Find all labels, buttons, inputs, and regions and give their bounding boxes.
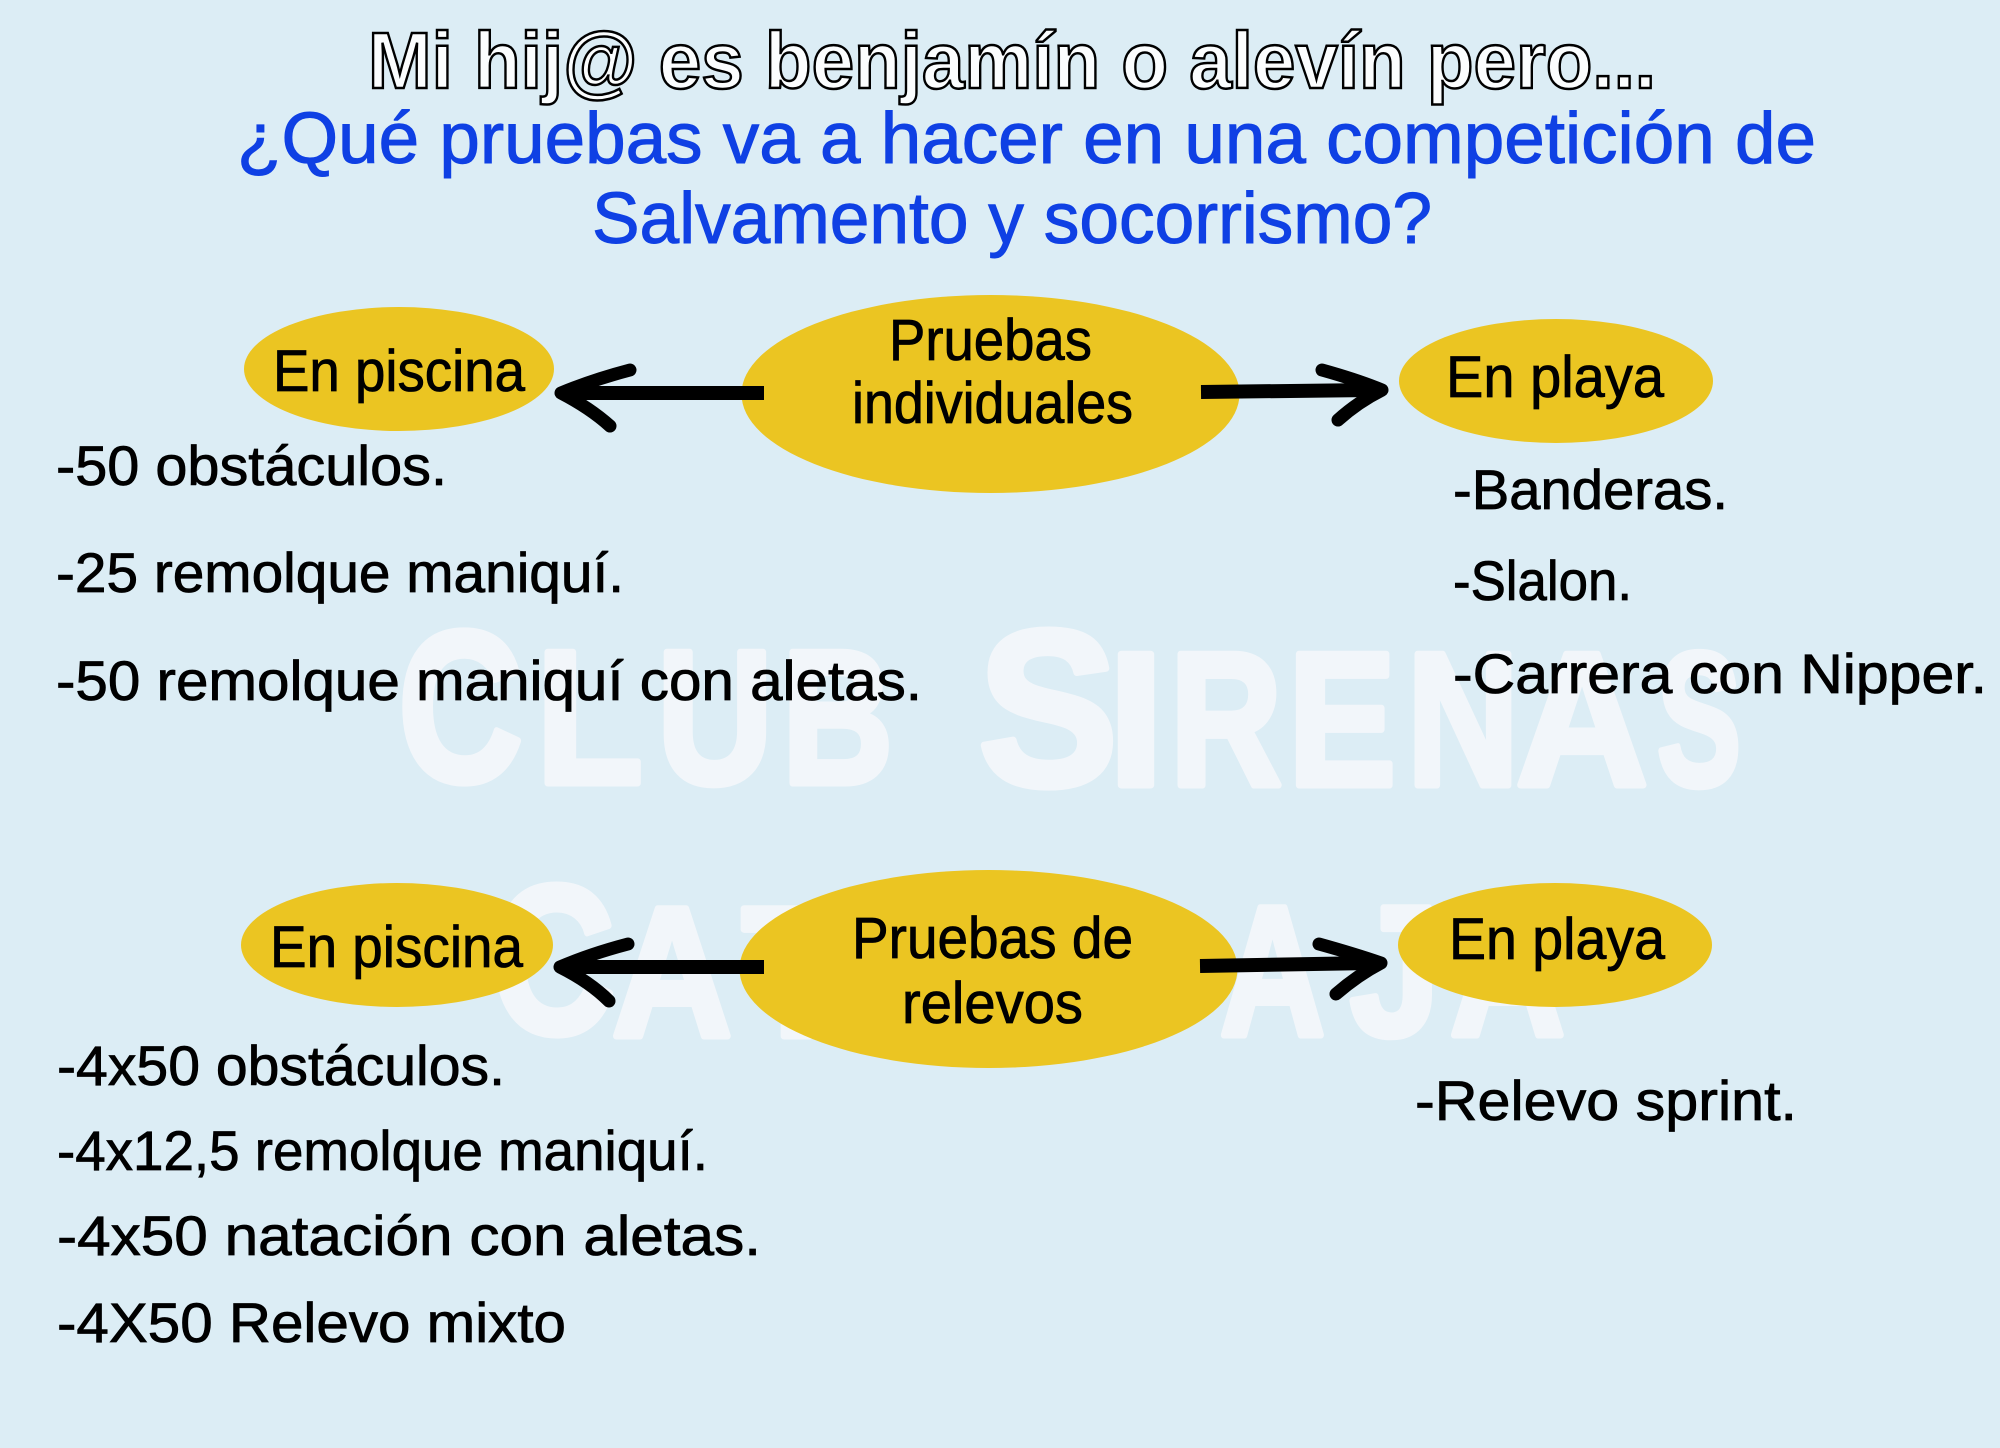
list: individual beach events: -Banderas. — [1453, 458, 1728, 521]
node: En playa individual: En playa — [1446, 345, 1665, 410]
list: relay pool events: -4x50 obstáculos. — [57, 1034, 505, 1097]
watermark: Club Sirenas: L — [536, 612, 643, 824]
title: Mi hij@ es benjamín o alevín pero... — [368, 16, 1656, 105]
list: individual beach events — [1453, 458, 1987, 705]
watermark: Club Sirenas — [398, 585, 1741, 833]
subtitle — [237, 99, 1816, 259]
list: relay beach events: -Relevo sprint. — [1415, 1069, 1797, 1132]
node: En playa individual — [1399, 319, 1713, 443]
node: Pruebas individuales — [742, 295, 1240, 493]
watermark: Club Sirenas: E — [1288, 614, 1396, 826]
subtitle: Salvamento y socorrismo? — [592, 179, 1432, 259]
watermark: second line, mostly hidden behind the ellipses: A — [1220, 869, 1325, 1075]
node: En piscina relevos: En piscina — [270, 915, 524, 980]
list: individual pool events: -50 obstáculos. — [56, 434, 447, 497]
watermark: Club Sirenas: S — [978, 585, 1118, 833]
list: relay pool events — [57, 1034, 761, 1354]
watermark: Club Sirenas: A — [1516, 614, 1648, 826]
watermark: Club Sirenas: U — [657, 612, 773, 824]
list: relay pool events: -4X50 Relevo mixto — [57, 1291, 566, 1354]
node: Pruebas individuales: Pruebas — [889, 308, 1092, 373]
watermark: Club Sirenas: B — [782, 612, 893, 824]
list: relay pool events: -4x50 natación con aletas. — [57, 1204, 761, 1267]
watermark: second line, mostly hidden behind the ellipses: J — [1350, 869, 1440, 1075]
subtitle: ¿Qué pruebas va a hacer en una competición de — [237, 99, 1816, 179]
list: relay pool events: -4x12,5 remolque maniquí. — [57, 1119, 708, 1182]
watermark: Club Sirenas: I — [1108, 614, 1164, 826]
list: individual beach events: -Slalon. — [1453, 549, 1632, 612]
arrow: individuales to playa — [1201, 370, 1382, 420]
node: En piscina individual: En piscina — [273, 339, 526, 404]
watermark: second line, mostly hidden behind the ellipses: A — [1450, 869, 1565, 1075]
arrow: individuales to piscina — [561, 370, 764, 426]
arrow: relevos to playa — [1200, 944, 1381, 994]
node: Pruebas individuales: individuales — [852, 371, 1133, 436]
watermark: Club Sirenas: N — [1407, 614, 1519, 826]
list: individual pool events — [56, 434, 922, 712]
watermark: Club Sirenas: S — [1657, 614, 1741, 826]
node: Pruebas de relevos: relevos — [902, 971, 1083, 1036]
node: En playa relevos: En playa — [1449, 907, 1666, 972]
watermark: Club Sirenas: R — [1170, 614, 1282, 826]
node: En piscina relevos — [241, 883, 553, 1007]
node: Pruebas de relevos: Pruebas de — [852, 906, 1133, 971]
list: individual pool events: -50 remolque maniquí con aletas. — [56, 649, 922, 712]
node: Pruebas de relevos — [740, 870, 1238, 1068]
watermark: second line, mostly hidden behind the ellipses — [491, 841, 1565, 1078]
watermark: second line, mostly hidden behind the ellipses: C — [491, 841, 615, 1078]
list: individual pool events: -25 remolque maniquí. — [56, 541, 624, 604]
watermark: Club Sirenas: C — [398, 586, 523, 827]
watermark: second line, mostly hidden behind the ellipses: A — [612, 870, 732, 1076]
node: En piscina individual — [244, 307, 554, 431]
arrow: relevos to piscina — [560, 944, 764, 1001]
watermark: second line, mostly hidden behind the ellipses: T — [742, 870, 852, 1076]
list: individual beach events: -Carrera con Nipper. — [1453, 642, 1987, 705]
node: En playa relevos — [1398, 883, 1712, 1007]
